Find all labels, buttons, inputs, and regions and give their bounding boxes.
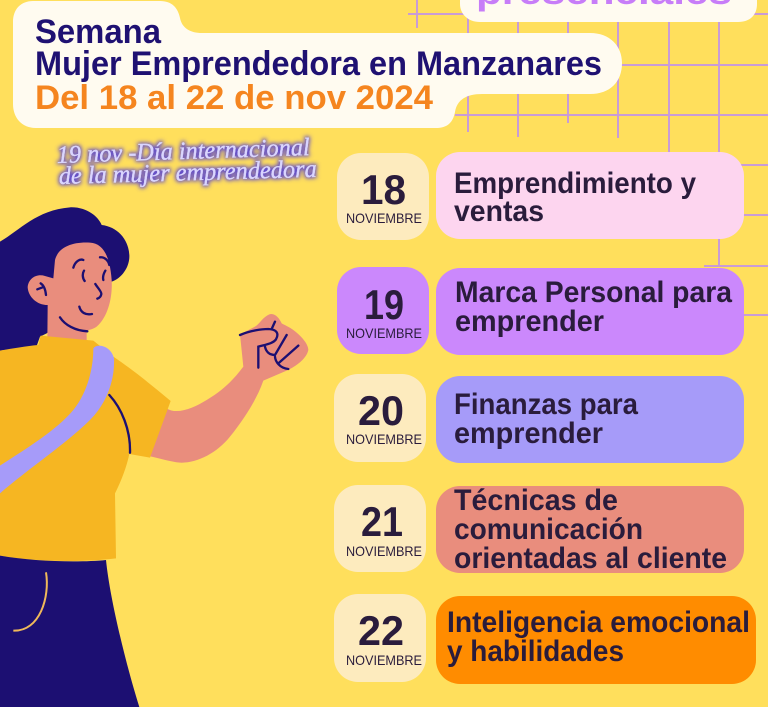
row 18: Emprendimiento y ventas <box>337 152 744 240</box>
row 22: Inteligencia emocional y habilidades <box>334 594 756 684</box>
row 21: Técnicas de comunicación: Técnicas de <box>454 484 618 517</box>
hair <box>0 207 129 351</box>
row 21: Técnicas de comunicación: 21 <box>361 498 403 545</box>
glowing note: international day: 19 nov -Día internacional <box>56 134 310 169</box>
topic card 20 <box>436 376 744 463</box>
row 21: Técnicas de comunicación: comunicación <box>454 513 643 546</box>
row 19: Marca Personal para emprender <box>337 267 744 355</box>
row 20: Finanzas para emprender: 20 <box>358 387 404 434</box>
date badge 22 <box>334 594 426 682</box>
illustration: woman with raised fist <box>0 207 308 707</box>
row 21: Técnicas de comunicación: NOVIEMBRE <box>346 543 422 559</box>
row 21: Técnicas de comunicación <box>334 484 744 575</box>
row 21: Técnicas de comunicación: orientadas al cliente <box>454 542 727 575</box>
row 22: Inteligencia emocional y habilidades: 22 <box>358 607 404 654</box>
glowing note: international day: de la mujer emprendedora <box>58 156 317 190</box>
date badge 20 <box>334 374 426 462</box>
topic card 21 <box>436 486 744 573</box>
topic card 18 <box>436 152 744 239</box>
row 20: Finanzas para emprender: emprender <box>454 417 603 450</box>
row 18: Emprendimiento y ventas: 18 <box>361 166 406 213</box>
row 22: Inteligencia emocional y habilidades: NOVIEMBRE <box>346 652 422 668</box>
row 19: Marca Personal para emprender: emprender <box>455 305 604 338</box>
face and neck <box>28 243 112 342</box>
row 20: Finanzas para emprender <box>334 374 744 463</box>
row 20: Finanzas para emprender: NOVIEMBRE <box>346 431 422 447</box>
row 18: Emprendimiento y ventas: Emprendimiento y <box>454 167 696 200</box>
topic card 19 <box>436 268 744 355</box>
row 20: Finanzas para emprender: Finanzas para <box>454 388 638 421</box>
row 19: Marca Personal para emprender: Marca Personal para <box>455 276 732 309</box>
title line: Semana: Semana <box>35 13 162 51</box>
face and hand line details <box>37 257 298 453</box>
row 18: Emprendimiento y ventas: ventas <box>454 195 544 228</box>
row 19: Marca Personal para emprender: NOVIEMBRE <box>346 325 422 341</box>
title line: Mujer Emprendedora en Manzanares: Mujer Emprendedora en Manzanares <box>35 45 602 83</box>
row 19: Marca Personal para emprender: 19 <box>364 281 404 328</box>
title panel <box>13 1 622 128</box>
row 22: Inteligencia emocional y habilidades: y habilidades <box>447 635 624 668</box>
date badge 18 <box>337 153 429 240</box>
date range: Del 18 al 22 de nov 2024 <box>35 79 433 117</box>
date badge 19 <box>337 267 429 354</box>
glowing note: international day <box>56 134 317 190</box>
bag strap <box>0 346 114 493</box>
date badge 21 <box>334 485 426 572</box>
pocket <box>13 572 47 631</box>
topic card 22 <box>436 596 756 684</box>
trousers <box>0 556 139 707</box>
top pill: presenciales <box>460 0 757 22</box>
row 18: Emprendimiento y ventas: NOVIEMBRE <box>346 210 422 226</box>
row 22: Inteligencia emocional y habilidades: Inteligencia emocional <box>447 606 750 639</box>
shirt <box>0 336 171 561</box>
arm and fist <box>148 314 308 463</box>
